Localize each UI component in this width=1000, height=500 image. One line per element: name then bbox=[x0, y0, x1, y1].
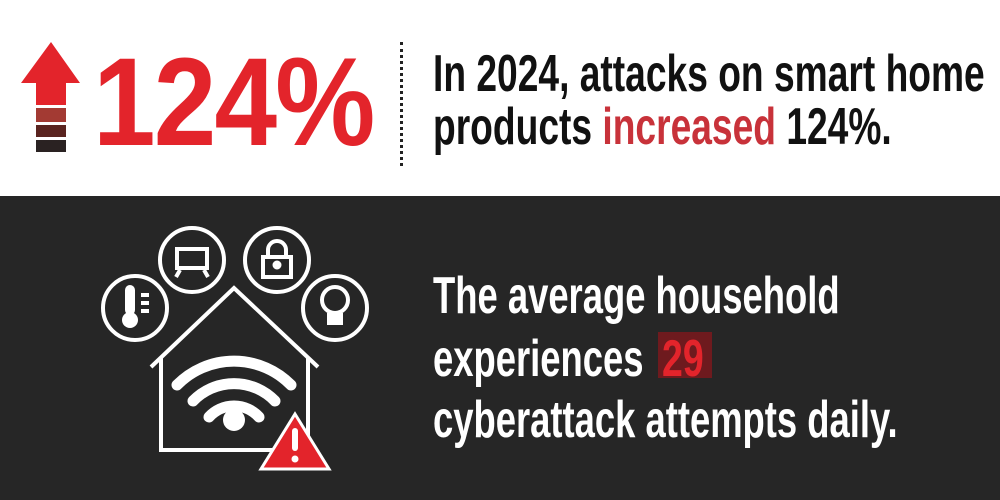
icon: thermometer bbox=[103, 276, 167, 340]
illustration: smart home bbox=[101, 226, 369, 470]
big stat 124%: 124% bbox=[93, 33, 374, 172]
icon: wifi bbox=[177, 361, 291, 417]
dotted divider bbox=[400, 42, 403, 166]
icon: up arrow bbox=[21, 42, 80, 152]
text: 2024 statement bbox=[433, 45, 985, 156]
text: products increased 124%. bbox=[433, 98, 892, 156]
icon: lock bbox=[245, 228, 309, 292]
text: cyberattack attempts daily. bbox=[433, 391, 898, 449]
icon: bulb bbox=[303, 276, 367, 340]
dark bottom band bbox=[0, 196, 1000, 500]
text: The average household bbox=[433, 267, 840, 325]
icon: warning triangle bbox=[261, 414, 329, 469]
icon: house bbox=[151, 288, 318, 450]
text: household statement bbox=[433, 267, 898, 449]
text: In 2024, attacks on smart home bbox=[433, 45, 985, 103]
highlight box behind 29 bbox=[658, 332, 712, 378]
text: experiences bbox=[433, 330, 643, 388]
stat 29: 29 bbox=[662, 330, 704, 388]
icon: tv bbox=[160, 228, 224, 292]
